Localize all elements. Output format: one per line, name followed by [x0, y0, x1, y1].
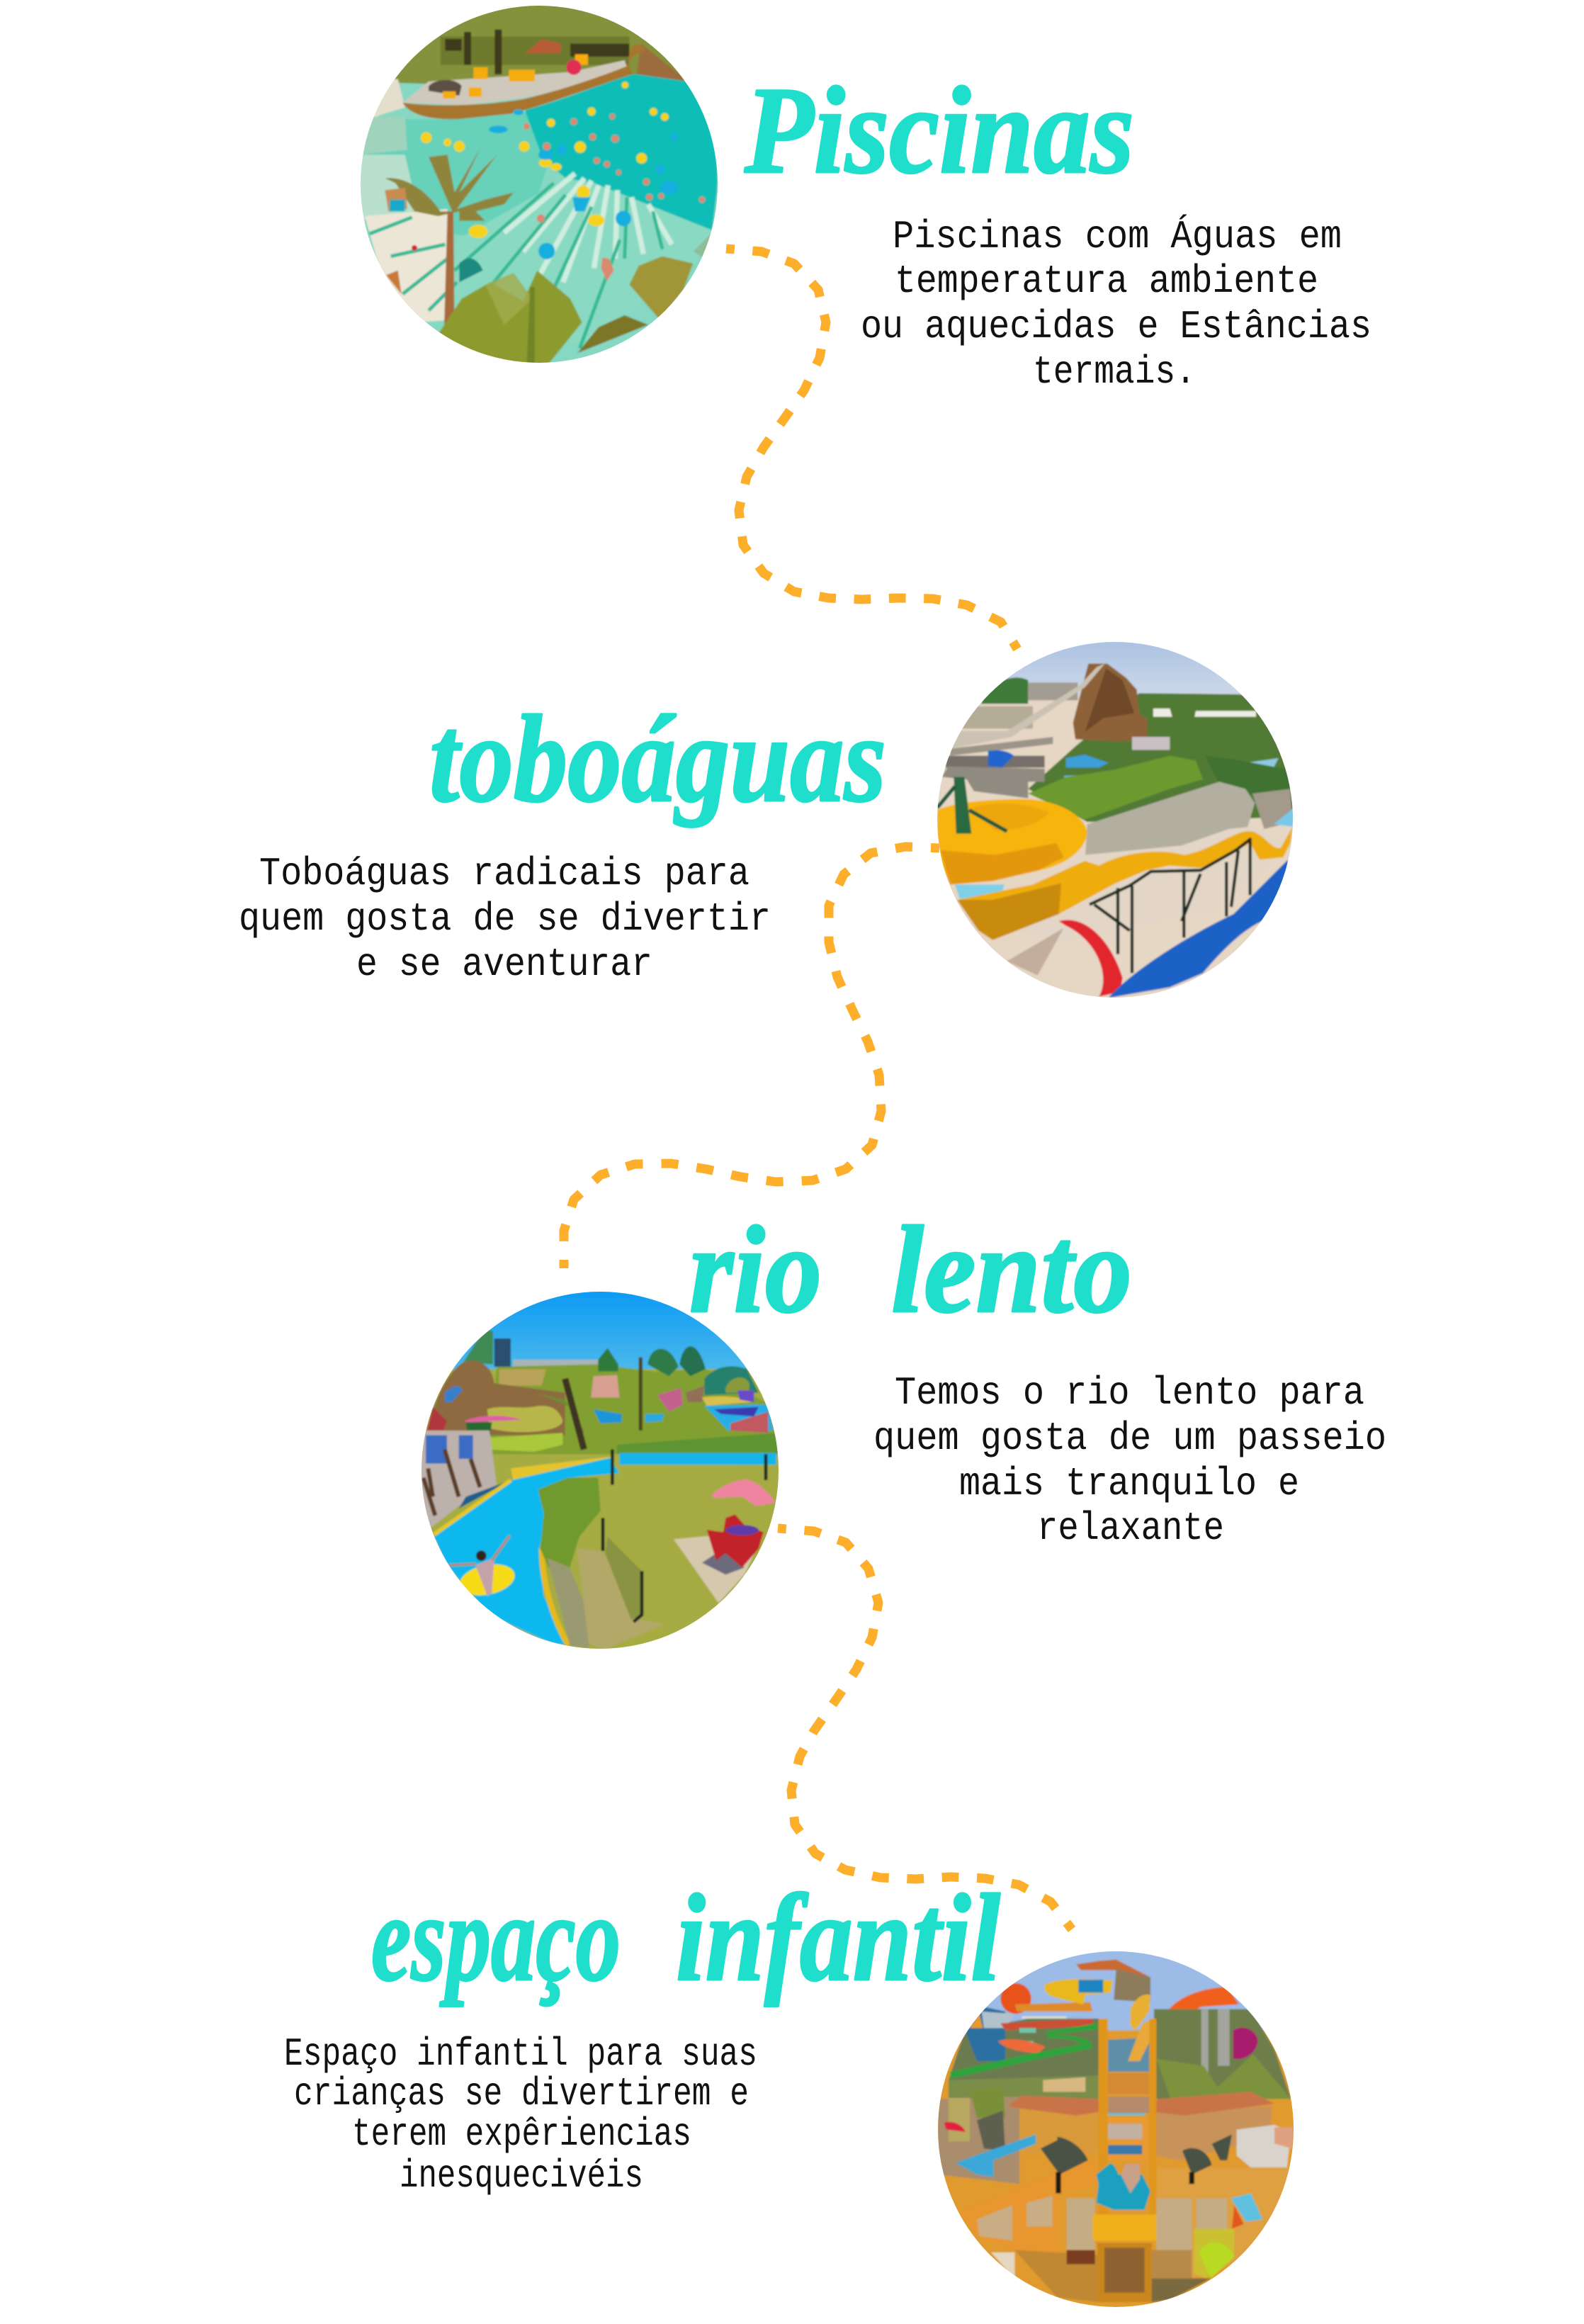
heading: Piscinas: Piscinas: [744, 62, 1134, 200]
photo: lazy river: [419, 1289, 781, 1652]
photo: wave pool: [358, 4, 720, 366]
text block: piscinas description: temperatura ambiente: [895, 259, 1318, 304]
text block: piscinas description: [861, 214, 1371, 395]
text block: toboáguas description: e se aventurar: [356, 942, 652, 987]
text block: toboáguas description: [239, 851, 771, 987]
text block: rio lento description: Temos o rio lento para: [895, 1370, 1364, 1416]
text block: espaço infantil description: crianças se divertirem e: [294, 2071, 749, 2116]
heading: toboáguas: toboáguas: [429, 690, 886, 828]
text block: toboáguas description: Toboáguas radicais para: [259, 851, 749, 896]
text block: rio lento description: relaxante: [1037, 1506, 1224, 1551]
panel: rio lento: [419, 1201, 1386, 1652]
photo: water slides: [934, 638, 1296, 1000]
connector: dashed path from rio lento to espaço infantil: [778, 1528, 1072, 1929]
text block: espaço infantil description: Espaço infantil para suas: [284, 2031, 757, 2077]
panel: toboáguas: [239, 638, 1296, 1000]
panel: piscinas: [358, 4, 1371, 395]
text block: espaço infantil description: [284, 2031, 757, 2199]
heading: rio lento: [689, 1201, 1132, 1339]
text block: espaço infantil description: terem expêriencias: [352, 2111, 691, 2157]
text block: espaço infantil description: inesquecivéis: [400, 2153, 643, 2199]
text block: rio lento description: mais tranquilo e: [959, 1461, 1299, 1506]
text block: piscinas description: ou aquecidas e Estâncias: [861, 304, 1371, 349]
photo: kids water playground: [934, 1948, 1297, 2311]
heading: rio lento: rio: [689, 1201, 822, 1339]
connector: dashed path from toboáguas to rio lento: [564, 847, 939, 1268]
text block: toboáguas description: quem gosta de se divertir: [239, 896, 771, 942]
text block: piscinas description: Piscinas com Águas em: [893, 214, 1342, 259]
heading: espaço infantil: [371, 1869, 1000, 2007]
text block: piscinas description: termais.: [1033, 349, 1196, 395]
heading: espaço infantil: infantil: [676, 1869, 1000, 2007]
connector: dashed path from piscinas to toboáguas: [726, 249, 1017, 649]
heading: rio lento: lento: [891, 1201, 1132, 1339]
panel: espaço infantil: [284, 1869, 1297, 2311]
heading: espaço infantil: espaço: [371, 1869, 621, 2007]
text block: rio lento description: [873, 1370, 1386, 1551]
text block: rio lento description: quem gosta de um passeio: [873, 1416, 1386, 1461]
